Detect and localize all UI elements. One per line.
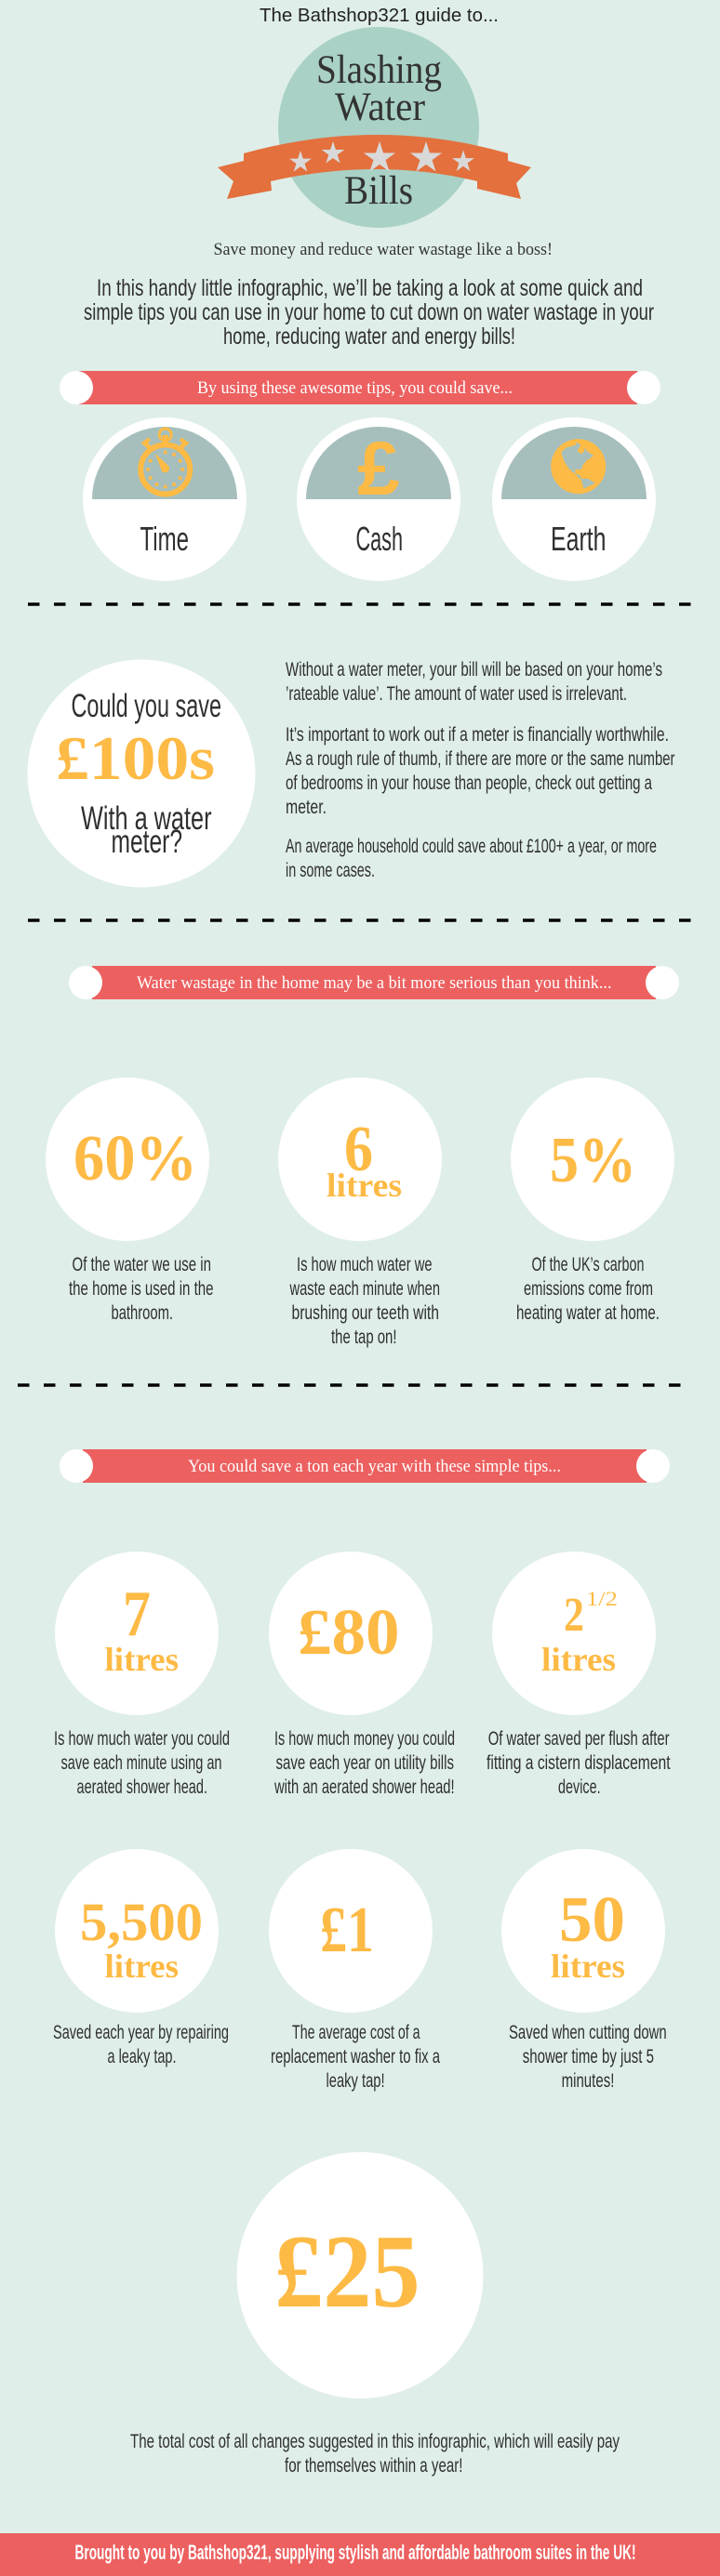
tip: 5,500 litres: 5,500 xyxy=(80,1892,203,1952)
stat: 6 litres: Is how much water we xyxy=(297,1254,432,1275)
text: with a water meter: With a water xyxy=(81,800,212,837)
tip: 2 and a half litres: litres xyxy=(541,1641,616,1678)
stat: 6 litres xyxy=(278,1077,442,1348)
text: could you save: Could you save xyxy=(71,688,221,724)
footer xyxy=(0,2533,720,2576)
tip: 1 pound: £1 xyxy=(320,1895,374,1966)
tip: 1 pound: leaky tap! xyxy=(326,2070,385,2092)
tip: 2 and a half litres: 2 xyxy=(564,1589,584,1642)
banner: save a ton xyxy=(60,1449,670,1483)
panel: cash xyxy=(297,417,460,581)
tip: 7 litres xyxy=(54,1552,230,1798)
banner: by using these tips xyxy=(60,371,660,404)
stat: 6 litres: the tap on! xyxy=(331,1327,396,1348)
intro text xyxy=(84,275,654,350)
ribbon with stars xyxy=(218,135,531,199)
total cost text: for themselves within a year! xyxy=(285,2455,463,2477)
panel: earth xyxy=(492,417,656,581)
total cost circle xyxy=(236,2152,484,2398)
tip: 80 pounds: save each year on utility bills xyxy=(275,1752,454,1774)
stat: 60 percent: 60% xyxy=(73,1123,197,1195)
tip: 2 and a half litres xyxy=(487,1552,671,1798)
tip: 2 and a half litres: device. xyxy=(558,1777,601,1798)
tip: 80 pounds: Is how much money you could xyxy=(274,1728,455,1750)
total cost circle: £25 xyxy=(274,2214,420,2330)
title: Slashing: Slashing xyxy=(316,48,442,92)
text: with a water meter xyxy=(81,800,212,860)
tip: 80 pounds: £80 xyxy=(298,1597,400,1669)
tip: 1 pound xyxy=(269,1849,440,2092)
tip: 7 litres: 7 xyxy=(123,1579,151,1650)
tip: 7 litres: save each minute using an xyxy=(61,1752,221,1774)
panel: water meter circle xyxy=(28,660,255,887)
tip: 50 litres: litres xyxy=(551,1948,625,1985)
tip: 50 litres: minutes! xyxy=(562,2070,614,2092)
icon: pound: £ xyxy=(357,427,400,511)
tip: 50 litres: shower time by just 5 xyxy=(523,2046,654,2067)
banner: water wastage xyxy=(69,966,679,999)
banner: by using these tips: By using these awesome tips, you could save... xyxy=(197,378,513,398)
stat: 60 percent: the home is used in the xyxy=(69,1278,214,1300)
tip: 50 litres: 50 xyxy=(559,1884,625,1956)
tip: 5,500 litres xyxy=(53,1849,229,2067)
stat: 5 percent xyxy=(511,1077,674,1324)
tip: 5,500 litres: a leaky tap. xyxy=(108,2046,177,2067)
stat: 100s: £100s xyxy=(56,724,215,793)
stat: 6 litres: waste each minute when xyxy=(289,1278,440,1300)
banner: save a ton: You could save a ton each year with these simple tips... xyxy=(188,1457,561,1476)
stat: 5 percent: emissions come from xyxy=(524,1278,653,1300)
total cost text xyxy=(130,2431,620,2477)
stat: 6 litres: brushing our teeth with xyxy=(292,1302,439,1324)
tip: 5,500 litres: Saved each year by repairing xyxy=(53,2022,229,2043)
label: Earth: Earth xyxy=(551,520,607,558)
title: Bills: Bills xyxy=(344,169,413,213)
stat: 6 litres: 6 xyxy=(344,1114,373,1185)
title badge xyxy=(218,27,531,228)
tip: 7 litres: litres xyxy=(104,1641,179,1678)
tip: 1 pound: replacement washer to fix a xyxy=(271,2046,440,2067)
tagline: Save money and reduce water wastage like a boss! xyxy=(214,240,553,259)
tip: 7 litres: aerated shower head. xyxy=(76,1777,207,1798)
tip: 5,500 litres: litres xyxy=(104,1948,179,1985)
header: guide to: The Bathshop321 guide to... xyxy=(260,6,499,26)
text: with a water meter: meter? xyxy=(112,824,182,860)
label: Time: Time xyxy=(140,520,189,558)
icon: globe xyxy=(551,439,606,494)
tip: 50 litres xyxy=(501,1849,667,2092)
tip: 1 pound: The average cost of a xyxy=(292,2022,420,2043)
text: water meter explanation: meter. xyxy=(286,797,327,818)
stat: 60 percent: Of the water we use in xyxy=(73,1254,211,1275)
stat: 6 litres: litres xyxy=(327,1167,402,1204)
banner: water wastage: Water wastage in the home may be a bit more serious than you think... xyxy=(137,973,612,993)
tip: 80 pounds: with an aerated shower head! xyxy=(273,1777,455,1798)
stat: 5 percent: 5% xyxy=(550,1125,636,1196)
tip: 7 litres: Is how much water you could xyxy=(54,1728,230,1750)
intro text: home, reducing water and energy bills! xyxy=(223,324,515,350)
text: water meter explanation: in some cases. xyxy=(286,860,375,881)
panel: time xyxy=(83,417,247,581)
stat: 5 percent: Of the UK’s carbon xyxy=(532,1254,644,1275)
title: Water: Water xyxy=(335,86,425,129)
tip: 80 pounds xyxy=(269,1552,455,1798)
tip: 2 and a half litres: 1/2 xyxy=(586,1587,618,1610)
stat: 60 percent: bathroom. xyxy=(112,1302,173,1324)
stat: 60 percent xyxy=(46,1077,214,1324)
icon: stopwatch xyxy=(140,429,190,495)
text: water meter explanation xyxy=(286,659,675,881)
label: Cash: Cash xyxy=(355,520,403,558)
stat: 5 percent: heating water at home. xyxy=(516,1302,660,1324)
